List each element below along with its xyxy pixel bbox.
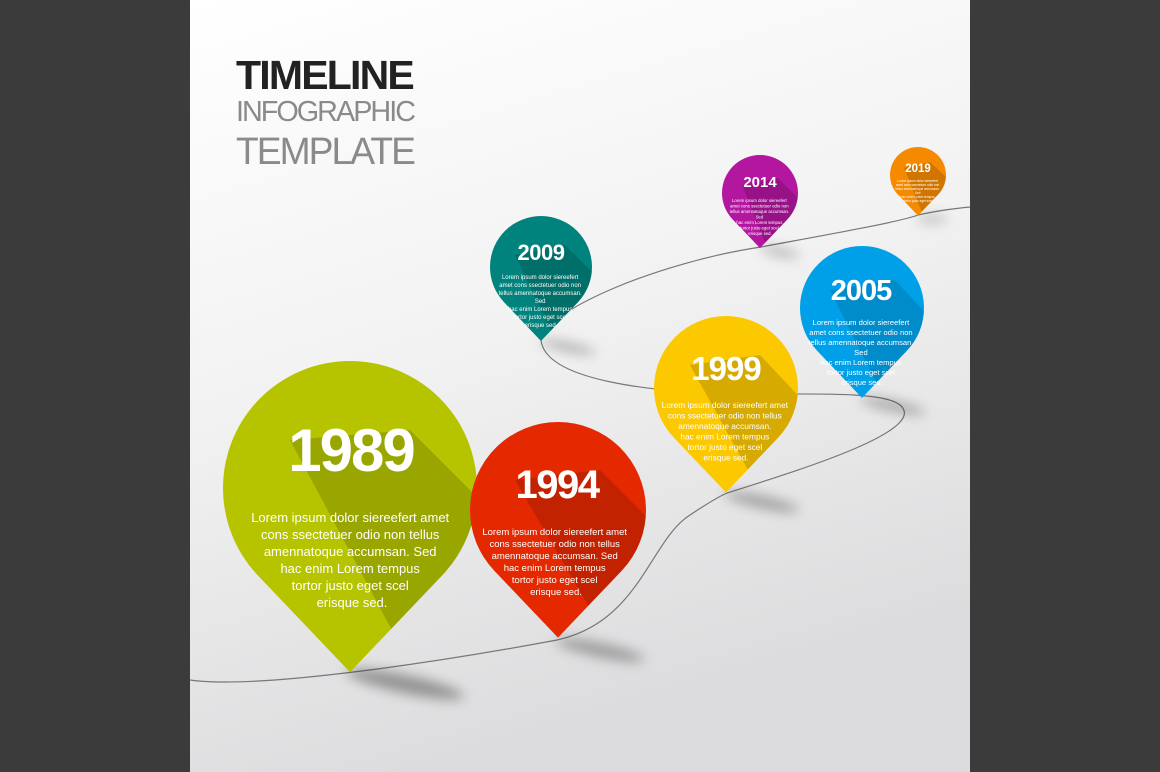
pin: 1994: 1994 <box>516 463 601 507</box>
pin: 2014: tortor justo eget scel <box>740 226 779 230</box>
pin: 1994: Lorem ipsum dolor siereefert amet <box>482 527 627 538</box>
pin: 2009: 2009 <box>518 240 565 265</box>
pin: 2005: amet cons ssectetuer odio non <box>809 328 913 337</box>
pin: 1989: tortor justo eget scel <box>292 578 409 593</box>
pin: 1994: hac enim Lorem tempus <box>504 563 606 574</box>
timeline curve <box>190 207 970 682</box>
pin: 2019: amet cons ssectetuer odio non <box>896 183 939 187</box>
pin: 2005: tortor justo eget scel <box>827 368 895 377</box>
pin: 2009: Lorem ipsum dolor siereefert <box>502 275 579 281</box>
pin: 2014: tellus amennatoque accumsan. <box>730 209 789 214</box>
pin: 2019: tellus amennatoque accumsan. <box>895 187 940 191</box>
title <box>236 52 415 173</box>
pin: 2005: 2005 <box>831 275 892 307</box>
pin: 1999: Lorem ipsum dolor siereefert amet <box>662 400 789 410</box>
pin: 2019: Sed <box>915 191 921 195</box>
pin: 2005 <box>800 246 924 398</box>
pin: 2019: Lorem ipsum dolor siereefert <box>897 179 938 183</box>
pin: 2009 <box>490 216 592 341</box>
pin: 1989: amennatoque accumsan. Sed <box>264 544 437 559</box>
background panel <box>190 0 970 772</box>
pin: 2019: hac enim Lorem tempus <box>900 195 935 199</box>
pin: 2005: tellus amennatoque accumsan. <box>808 338 914 347</box>
pin: 1994: erisque sed. <box>530 587 582 598</box>
pin: 1994: cons ssectetuer odio non tellus <box>489 539 620 550</box>
pin: 1989: erisque sed. <box>317 595 387 610</box>
pin: 1994 <box>470 422 646 638</box>
pin: 1999: 1999 <box>691 350 761 387</box>
pin: 2014: 2014 <box>743 174 777 191</box>
pin: 2014: Sed <box>756 214 764 220</box>
pin: 2005: hac enim Lorem tempus <box>820 358 902 367</box>
pin: 2019: 2019 <box>905 163 931 175</box>
pin: 2009: erisque sed. <box>525 323 558 329</box>
pin: 2014: erisque sed. <box>748 231 772 236</box>
pin: 2014: hac enim Lorem tempus <box>736 220 782 225</box>
pin: 1999: hac enim Lorem tempus <box>680 432 769 442</box>
pin: 1999: tortor justo eget scel <box>687 442 762 452</box>
pin: 2005: erisque sed. <box>841 378 883 387</box>
pin: 2009: tellus amennatoque accumsan. <box>499 291 582 297</box>
pin: 2014: Lorem ipsum dolor siereefert <box>732 198 788 203</box>
ground shadows <box>344 216 947 705</box>
pin: 2009: tortor justo eget scel <box>513 315 567 321</box>
pin: 1999: amennatoque accumsan. <box>678 421 771 431</box>
title: INFOGRAPHIC <box>236 96 415 128</box>
pin: 1994: tortor justo eget scel <box>512 575 597 586</box>
pin: 2014: amet cons ssectetuer odio non <box>730 204 789 208</box>
pin: 2019: tortor justo eget scel <box>904 199 933 203</box>
title: TEMPLATE <box>236 131 415 173</box>
pin: 1994: amennatoque accumsan. Sed <box>492 551 618 562</box>
pin: 1989: Lorem ipsum dolor siereefert amet <box>251 510 450 525</box>
pin: 1989 <box>223 361 476 672</box>
pin: 1999: cons ssectetuer odio non tellus <box>668 410 782 420</box>
pin: 2009: hac enim Lorem tempus <box>508 307 572 313</box>
pin: 2009: Sed <box>535 299 546 305</box>
pin: 2005: Lorem ipsum dolor siereefert <box>813 318 910 327</box>
title: TIMELINE <box>236 52 413 98</box>
pin: 1999: erisque sed. <box>703 452 749 462</box>
pin: 2019 <box>890 147 946 216</box>
pin: 2005: Sed <box>854 348 868 357</box>
pin: 2014 <box>722 155 798 248</box>
pin: 1999 <box>654 316 798 492</box>
pin: 1989: cons ssectetuer odio non tellus <box>261 527 440 542</box>
pin: 1989: 1989 <box>288 417 414 484</box>
pin: 2009: amet cons ssectetuer odio non <box>499 283 581 289</box>
pin: 1989: hac enim Lorem tempus <box>280 561 420 576</box>
